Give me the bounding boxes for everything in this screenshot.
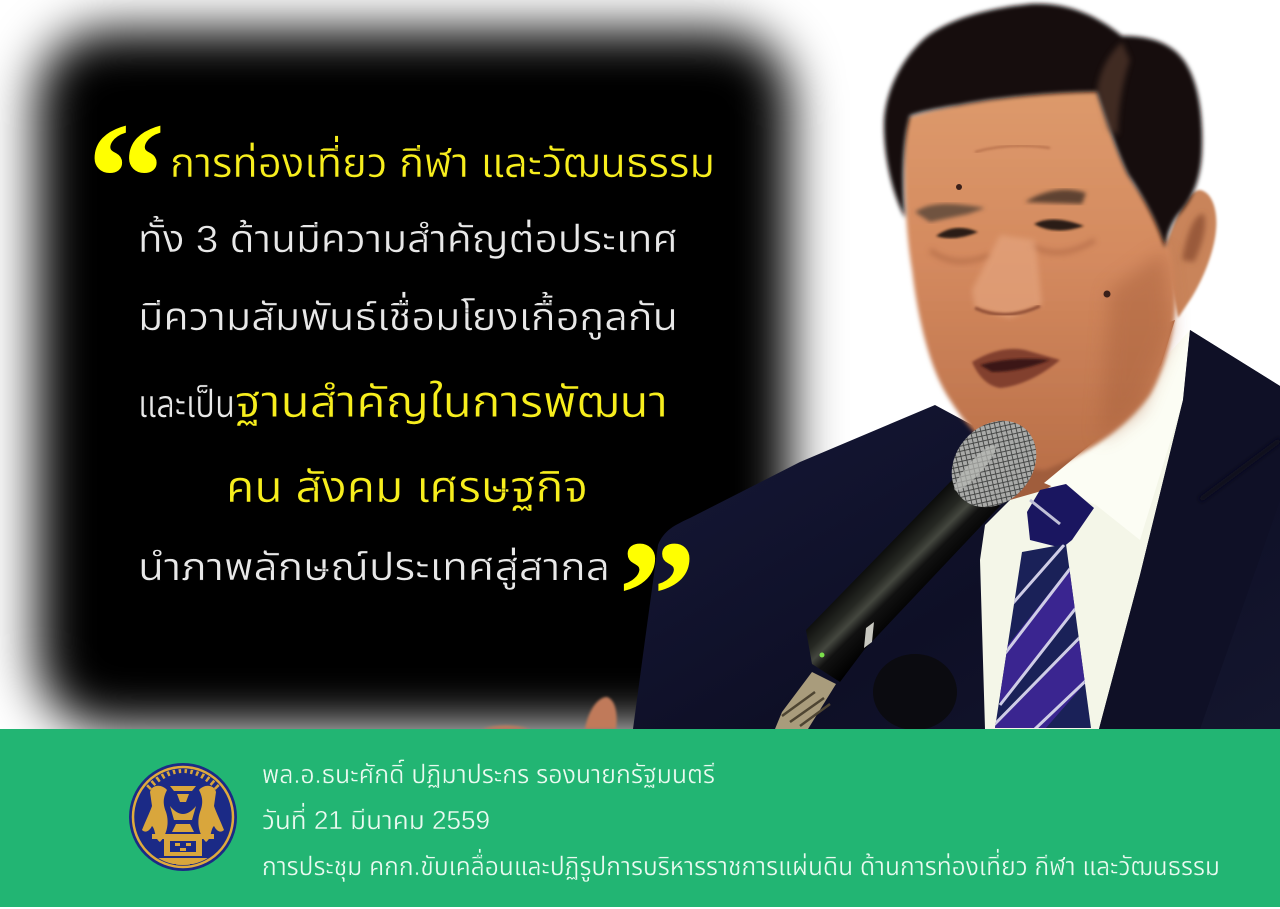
microphone switch bbox=[864, 622, 874, 648]
neck bbox=[960, 320, 1175, 500]
cheek shadow bbox=[1100, 250, 1172, 440]
eyes bbox=[936, 228, 978, 238]
microphone cable bbox=[775, 672, 836, 729]
under-eye shadows bbox=[930, 240, 1095, 261]
quote line 2: ทั้ง 3 ด้านมีความสำคัญต่อประเทศ bbox=[138, 215, 678, 261]
seal top ornaments bbox=[148, 770, 218, 788]
moles bbox=[956, 184, 962, 190]
icon: government seal bbox=[129, 763, 237, 871]
ear bbox=[1165, 190, 1216, 318]
meeting name: การประชุม คกก.ขับเคลื่อนและปฏิรูปการบริหารราชการแผ่นดิน ด้านการท่องเที่ยว กีฬา และวัฒนธรรม bbox=[262, 848, 1220, 882]
second microphone silhouette bbox=[873, 654, 957, 730]
date: วันที่ 21 มีนาคม 2559 bbox=[262, 802, 490, 835]
forehead wrinkle bbox=[975, 146, 1050, 152]
microphone body bbox=[806, 478, 1000, 682]
quote line 3: มีความสัมพันธ์เชื่อมโยงเกื้อกูลกัน bbox=[138, 291, 678, 340]
microphone highlight bbox=[966, 482, 982, 500]
microphone indicator bbox=[820, 652, 824, 658]
seal pedestal bbox=[152, 834, 214, 856]
quote line 4 right: ฐานสำคัญในการพัฒนา bbox=[235, 378, 668, 427]
panel: blurred black quote background bbox=[37, 30, 790, 728]
footer text bbox=[262, 759, 1220, 882]
opening quotation mark: “ bbox=[87, 90, 166, 264]
suit jacket bbox=[633, 330, 1280, 729]
hand bbox=[482, 697, 617, 729]
seal central urn bbox=[170, 786, 196, 832]
seal left lion bbox=[142, 786, 168, 842]
microphone grille bbox=[952, 420, 1036, 508]
quote line 4 left: และเป็น bbox=[138, 384, 235, 426]
photo: speaker at microphone bbox=[482, 4, 1280, 730]
seal right lion bbox=[198, 786, 224, 842]
panel: green footer bbox=[0, 729, 1280, 907]
jacket lapel bbox=[1099, 330, 1280, 729]
necktie bbox=[990, 484, 1095, 729]
closing quotation mark: ” bbox=[618, 508, 696, 682]
nose bbox=[972, 235, 1042, 318]
shirt bbox=[980, 330, 1190, 729]
eyebrows bbox=[915, 204, 985, 222]
lapel notch shadow bbox=[1200, 440, 1280, 500]
microphone bbox=[775, 420, 1036, 729]
speaker name and title: พล.อ.ธนะศักดิ์ ปฏิมาประกร รองนายกรัฐมนตรี bbox=[262, 759, 715, 789]
hair parting bbox=[1097, 42, 1130, 135]
quote line 1: การท่องเที่ยว กีฬา และวัฒนธรรม bbox=[170, 135, 715, 186]
seal base band bbox=[158, 858, 208, 865]
face bbox=[904, 88, 1176, 470]
head bbox=[884, 4, 1216, 470]
hair bbox=[884, 4, 1202, 248]
mouth bbox=[972, 349, 1060, 388]
quote line 5: คน สังคม เศรษฐกิจ bbox=[226, 463, 588, 512]
shirt collar bbox=[1044, 330, 1190, 540]
quote line 6: นำภาพลักษณ์ประเทศสู่สากล bbox=[138, 547, 610, 590]
quote text bbox=[87, 90, 715, 682]
